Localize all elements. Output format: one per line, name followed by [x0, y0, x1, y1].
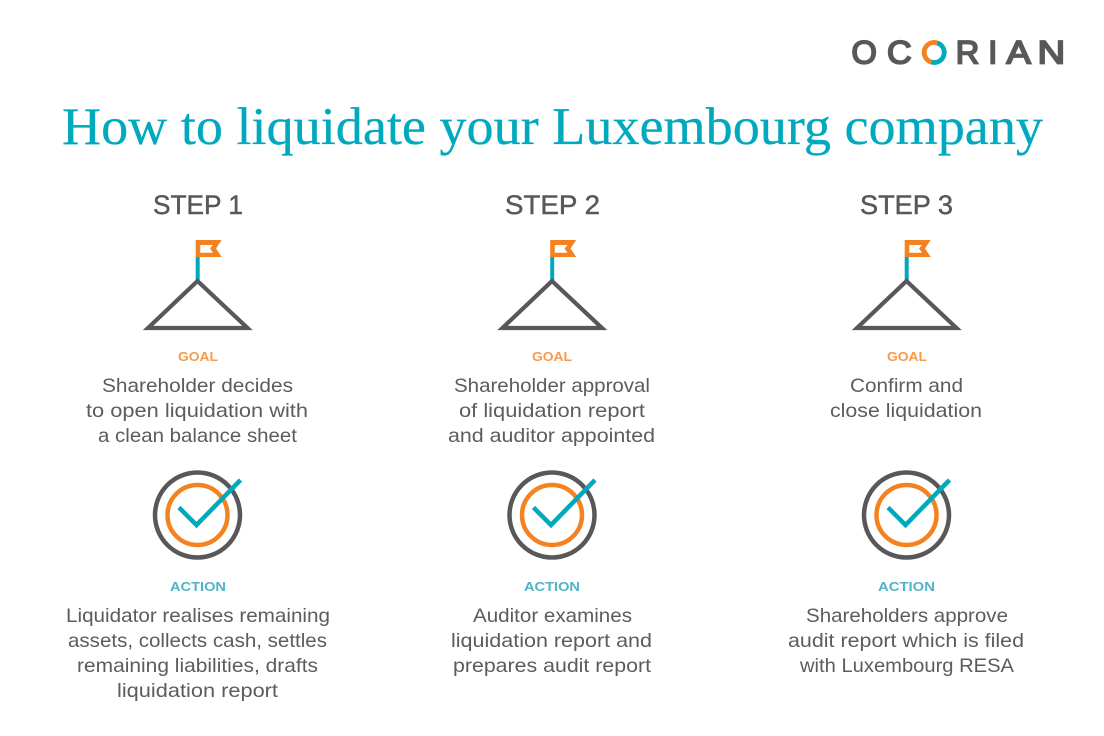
- goal text: [830, 375, 982, 422]
- goal text: and auditor appointed: [448, 425, 655, 447]
- goal text: a clean balance sheet: [98, 425, 298, 447]
- heading: step 1: STEP 1: [153, 190, 243, 220]
- logo: Ocorian: A: [1006, 35, 1031, 71]
- icon: target with check mark: [510, 472, 595, 558]
- action label: ACTION: [878, 579, 935, 594]
- goal label: GOAL: [887, 349, 927, 364]
- action text: assets, collects cash, settles: [68, 630, 327, 652]
- icon: mountain with flag: [148, 240, 248, 328]
- goal text: of liquidation report: [459, 400, 646, 422]
- icon: target with check mark: [864, 472, 950, 558]
- heading: step 2: STEP 2: [505, 190, 600, 220]
- action text: [451, 605, 652, 677]
- logo: Ocorian: I: [988, 34, 997, 70]
- goal text: Shareholder decides: [102, 375, 293, 397]
- goal label: GOAL: [532, 349, 572, 364]
- goal text: to open liquidation with: [86, 400, 308, 422]
- logo: Ocorian: O: [852, 34, 877, 70]
- goal text: close liquidation: [830, 400, 982, 422]
- icon: mountain with flag: [502, 240, 602, 328]
- panel: step 1: [66, 190, 330, 702]
- action text: remaining liabilities, drafts: [77, 655, 318, 677]
- logo: Ocorian: [852, 34, 1065, 71]
- panel: step 2: [448, 190, 655, 677]
- logo: Ocorian: N: [1038, 34, 1065, 71]
- action text: liquidation report and: [451, 630, 652, 652]
- title: How to liquidate your Luxembourg company: [62, 98, 1044, 156]
- goal text: [86, 375, 308, 447]
- action text: Liquidator realises remaining: [66, 605, 330, 627]
- action text: with Luxembourg RESA: [799, 655, 1014, 677]
- logo: Ocorian: R: [956, 34, 979, 70]
- action text: audit report which is filed: [788, 630, 1024, 652]
- goal text: [448, 375, 655, 447]
- logo: Ocorian: C: [887, 35, 912, 71]
- goal text: Confirm and: [850, 375, 963, 397]
- goal label: GOAL: [178, 349, 218, 364]
- action text: Shareholders approve: [806, 605, 1008, 627]
- action text: [788, 605, 1024, 677]
- action label: ACTION: [170, 579, 226, 594]
- action text: prepares audit report: [453, 655, 652, 677]
- action label: ACTION: [524, 579, 580, 594]
- heading: step 3: STEP 3: [860, 190, 953, 220]
- action text: Auditor examines: [473, 605, 632, 627]
- action text: liquidation report: [117, 680, 279, 702]
- icon: mountain with flag: [857, 240, 956, 328]
- panel: step 3: [788, 190, 1024, 677]
- icon: target with check mark: [155, 472, 240, 558]
- action text: [66, 605, 330, 702]
- goal text: Shareholder approval: [454, 375, 650, 397]
